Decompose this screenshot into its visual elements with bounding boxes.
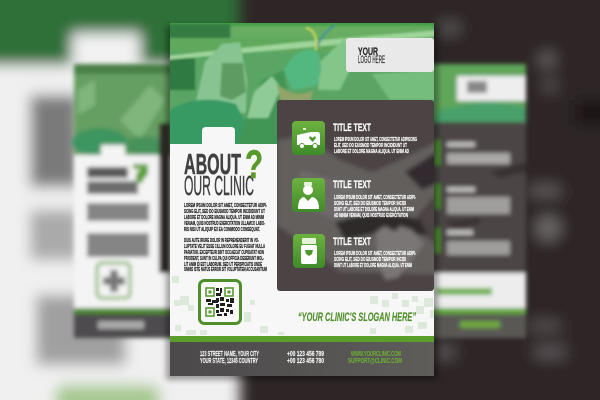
about body text: LUPTATE VELIT ESSE CILLUM DOLORE EU FUGIAT NULLA	[184, 244, 265, 250]
blurred background left	[0, 0, 260, 400]
logo box	[346, 38, 434, 72]
about body text: LIT ANIM ID EST LABORUM. SED UT PERSPICIATIS UNDE	[184, 262, 262, 268]
web and email: WWW.YOURCLINIC.COM	[351, 349, 401, 358]
QR code	[200, 280, 240, 324]
main flyer	[165, 18, 440, 376]
about body text: RIS NISI UT ALIQUIP EX EA COMMODO CONSEQUAT.	[184, 227, 260, 233]
logo text	[358, 46, 385, 66]
feature 1	[292, 121, 417, 155]
about body text: SCING ELIT, SED DO EIUSMOD TEMPOR INCIDIDUNT UT	[184, 209, 265, 215]
question mark: ?	[245, 143, 263, 187]
dark features panel: LOREM IPSUM DOLOR SIT AMET, CONSECTETUR ADIPISCING	[334, 137, 417, 143]
title text: TITLE TEXT	[333, 236, 371, 248]
icon: medicine bottle	[293, 234, 325, 268]
description	[334, 195, 416, 219]
about body text: DUIS AUTE IRURE DOLOR IN REPREHENDERIT IN VO-	[184, 238, 259, 244]
icon: ambulance	[292, 121, 325, 155]
description	[334, 137, 417, 155]
phone: +00 123 456 780	[287, 356, 324, 365]
web and email	[348, 349, 402, 365]
icon: doctor	[292, 178, 325, 212]
description: LOREM IPSUM DOLOR SIT AMET, CONSECTETUR ADIPI-	[334, 251, 416, 257]
slogan: “YOUR CLINIC'S SLOGAN HERE”	[298, 310, 416, 324]
description	[334, 251, 416, 269]
about body text: VENIAM, QUIS NOSTRUD EXERCITATION ULLAMCO LABO-	[184, 221, 265, 227]
description: AD MINIM VENIAM, QUIS NOSTRUD EXERCITATION	[334, 213, 408, 219]
left blurred flyer	[72, 64, 174, 338]
description: SCING ELIT, SED DO EIUSMOD TEMPOR INCIDI	[334, 257, 406, 263]
about body text: LOREM IPSUM DOLOR SIT AMET, CONSECTETUR ADIPI-	[184, 203, 267, 209]
title text: TITLE TEXT	[333, 179, 371, 191]
about body text: PARIATUR. EXCEPTEUR SINT OCCAECAT CUPIDATAT NON	[184, 250, 264, 256]
logo box: LOGO HERE	[358, 54, 385, 66]
about title	[184, 143, 263, 201]
address: YOUR STATE, 12345 COUNTRY	[200, 356, 258, 365]
address	[200, 349, 259, 365]
title text: TITLE TEXT	[333, 122, 371, 134]
logo text: YOUR	[358, 46, 378, 58]
description: LOREM IPSUM DOLOR SIT AMET, CONSECTETUR ADIPI-	[334, 195, 416, 201]
description: SCING ELIT, SED DO EIUSMOD TEMPOR INCIDI	[334, 201, 406, 207]
footer	[170, 336, 434, 376]
web and email: SUPPORT@CLINIC.COM	[348, 356, 402, 365]
flyer white body	[170, 23, 434, 343]
blurred background right	[240, 0, 600, 400]
about body text: PROIDENT, SUNT IN CULPA QUI OFFICIA DESERUNT MOL-	[184, 256, 264, 262]
dark features panel	[277, 100, 440, 291]
hands photo	[277, 135, 440, 280]
right blurred flyer	[430, 64, 526, 338]
description: DUNT UT LABORE ET DOLORE MAGNA ALIQUA. UT ENIM	[334, 207, 414, 213]
address: 123 STREET NAME, YOUR CITY	[200, 349, 259, 358]
heading: about: ABOUT	[184, 149, 241, 181]
phone: +00 123 456 789	[287, 349, 324, 358]
feature 3	[293, 234, 416, 269]
phone	[287, 349, 324, 365]
description: DUNT UT LABORE ET DOLORE MAGNA ALIQUA. UT ENIM	[334, 263, 412, 269]
bottom pixel mosaic	[172, 276, 434, 335]
about body text: LABORE ET DOLORE MAGNA ALIQUA. UT ENIM AD MINIM	[184, 215, 264, 221]
main flyer shadow	[166, 26, 438, 380]
main flyer: OMNIS ISTE NATUS ERROR SIT VOLUPTATEM ACCUSANTIUM	[184, 267, 267, 273]
description: ELIT, SED DO EIUSMOD TEMPOR INCIDIDUNT UT	[334, 143, 407, 149]
white tab	[170, 127, 280, 300]
feature 2	[292, 178, 416, 219]
header photo: surgeons	[170, 23, 434, 144]
description: LABORE ET DOLORE MAGNA ALIQUA. UT ENIM AD	[334, 149, 409, 155]
main flyer: OUR CLINIC	[184, 170, 254, 201]
about body text	[184, 203, 267, 273]
